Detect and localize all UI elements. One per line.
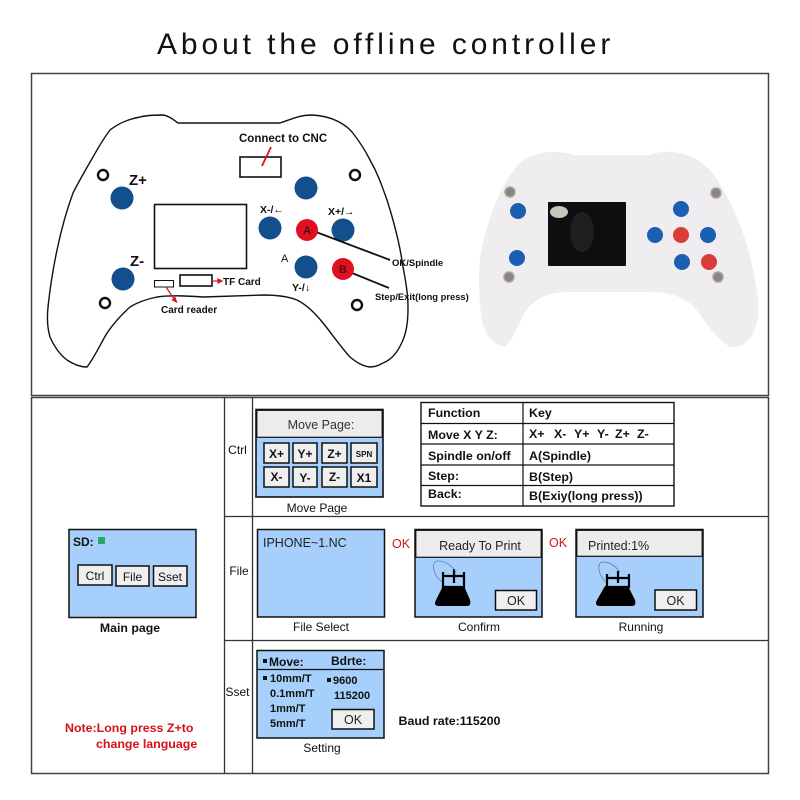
function key table: Spindle on/off [428,449,511,463]
running screen [576,530,703,617]
setting caption: Setting [303,741,341,755]
card reader slot [154,280,174,287]
callout labels: A [281,253,289,265]
main page caption: Main page [100,621,160,635]
icon: machine [596,562,635,606]
move page key labels: X1 [357,471,372,485]
photo blue buttons [509,201,716,270]
move page key labels: Z- [329,470,340,484]
function key table [421,402,674,506]
red button B: B [339,264,347,276]
function key table: Z- [637,427,649,441]
function key table: X- [554,427,566,441]
controller photo [479,152,758,347]
main page buttons: Sset [158,570,183,584]
row label: File: File [229,564,249,578]
running screen: Printed:1% [588,539,649,553]
main page buttons: Ctrl [86,569,104,583]
callout labels: Z+ [129,172,147,189]
red button A [296,219,318,241]
confirm OK button: OK [507,594,526,608]
function key table: B(Exiy(long press)) [529,489,643,503]
setting screen: 0.1mm/T [270,688,315,700]
photo screws [504,187,723,282]
callout labels: TF Card [223,277,261,288]
controller line diagram [47,115,469,367]
callout labels: OK/Spindle [392,258,443,269]
panel: controller overview [32,74,768,396]
language note [65,721,197,751]
setting OK button: OK [344,713,363,727]
main page screen [69,530,196,618]
language note: Note:Long press Z+to [65,721,194,735]
red button B [332,258,354,280]
screen outline [154,204,246,268]
function key table: Y+ [574,427,590,441]
move page key labels: SPN [356,450,372,459]
file select screen [258,530,384,617]
function key table: Function [428,406,480,420]
setting screen: 5mm/T [270,718,306,730]
callout labels [129,133,469,316]
main page buttons: File [123,570,142,584]
move page screen [256,410,383,497]
connector port [240,157,281,177]
callout labels: Y-/↓ [292,282,310,294]
setting screen: Bdrte: [331,654,366,668]
setting screen: 1mm/T [270,703,306,715]
function key table: X+ [529,427,545,441]
function key table: B(Step) [529,470,573,484]
move page key labels: X+ [269,447,284,461]
function key table: Z+ [615,427,630,441]
photo screen [548,202,626,266]
setting screen: 10mm/T [270,673,312,685]
SD status indicator [98,537,105,544]
panel: menu table [32,397,768,774]
callout labels: Step/Exit(long press) [375,291,469,302]
function key table: Move X Y Z: [428,428,498,442]
function key table: A(Spindle) [529,449,591,463]
confirm caption: Confirm [458,620,500,634]
OK arrow label one: OK [392,537,411,551]
photo sticker [550,206,568,218]
callout labels: X+/→ [328,206,355,218]
move page caption: Move Page [287,501,348,515]
leader lines [316,232,390,288]
move page key labels: Z+ [327,447,342,461]
move page key labels [269,447,372,485]
row label: Ctrl: Ctrl [228,443,247,457]
red button A: A [303,225,311,237]
icon: machine [433,561,470,606]
red arrows [166,147,271,302]
callout labels: Connect to CNC [239,133,327,145]
running caption: Running [619,620,663,634]
callout labels: Card reader [161,305,217,316]
setting screen: Move: [269,655,304,669]
photo red buttons [673,227,717,270]
confirm screen: Ready To Print [439,539,521,553]
move page screen: Move Page: [288,418,354,432]
move page key labels: X- [270,470,283,484]
running OK button: OK [666,594,685,608]
function key table: Step: [428,469,459,483]
main page screen: SD: [73,535,94,549]
language note: change language [96,737,197,751]
blue buttons [110,176,354,290]
confirm screen [415,530,542,617]
callout labels: X-/← [260,204,284,216]
OK arrow label two: OK [549,536,568,550]
file select screen: IPHONE~1.NC [263,536,347,550]
setting screen: 9600 [333,675,357,687]
callout labels: Z- [130,253,144,270]
TF card slot [180,275,212,286]
move page key labels: Y+ [297,447,313,461]
photo screen reflection [570,212,594,252]
file select caption: File Select [293,620,350,634]
title: About the offline controller [157,28,614,61]
move page keys [264,443,377,487]
setting screen [257,650,384,738]
function key table: Key [529,406,552,420]
move page key labels: Y- [299,471,311,485]
function key table: Y- [597,427,609,441]
mounting holes [98,170,362,310]
row label: Sset: Sset [225,685,250,699]
main page buttons [78,565,187,586]
function key table: Back: [428,487,462,501]
baud rate note: Baud rate:115200 [398,714,501,728]
setting screen: 115200 [334,690,370,702]
